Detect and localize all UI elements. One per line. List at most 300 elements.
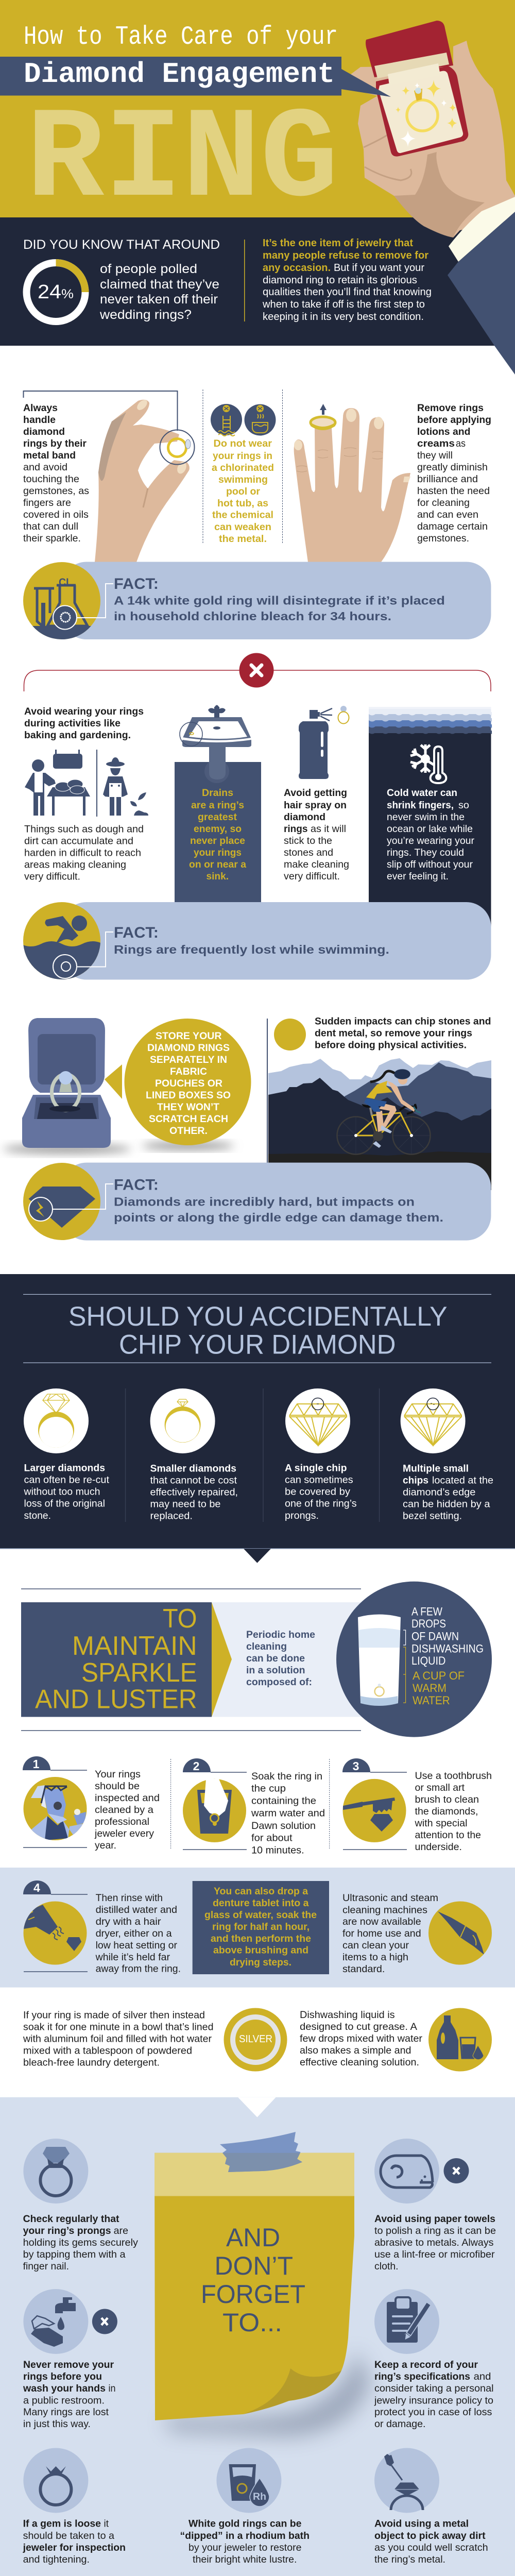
step 3: 3 xyxy=(353,1759,359,1773)
dough text xyxy=(24,824,144,882)
illustration: open hand with ring xyxy=(294,404,410,562)
callout: denture tablet: glass of water, soak the xyxy=(204,1909,317,1921)
tip: wash hands: a public restroom. xyxy=(23,2395,105,2406)
remove rings text: creams xyxy=(417,438,455,449)
icon: small diamond ring xyxy=(150,1388,215,1453)
panel: cold water: shrink fingers, xyxy=(387,800,454,811)
intro paragraph: any occasion. xyxy=(263,262,331,274)
step 4: dry with a hair xyxy=(96,1916,161,1927)
chip text: smaller diamonds: that cannot be cost xyxy=(150,1475,237,1486)
icon: large diamond ring xyxy=(24,1388,89,1453)
tip: avoid paper towels: cloth. xyxy=(374,2261,399,2272)
tip: loose gem xyxy=(23,2448,126,2565)
handle rings text xyxy=(23,402,89,544)
chip column dividers xyxy=(126,1388,380,1522)
tip: check prongs: Check regularly that xyxy=(23,2213,119,2225)
step 1: Your rings xyxy=(95,1769,141,1780)
fact panel: diamond hardness: FACT: xyxy=(114,1177,159,1194)
icon: silver plate xyxy=(224,2008,287,2071)
donut chart: 24%: 24 xyxy=(38,281,61,303)
intro paragraph xyxy=(262,238,432,323)
chip text: larger diamonds: loss of the original xyxy=(24,1498,105,1509)
panel: cold water: rings. They could xyxy=(387,847,464,858)
callout: store your rings xyxy=(105,1019,251,1149)
maintain title box: TO xyxy=(163,1604,197,1634)
handle rings text: diamond xyxy=(23,426,65,437)
dough text: dirt can accumulate and xyxy=(24,836,133,847)
remove rings text: and can even xyxy=(417,509,478,520)
tip: metal object xyxy=(374,2448,488,2565)
hair spray text: rings xyxy=(284,823,308,835)
fact panel: chlorine bleach xyxy=(23,562,491,639)
baking and gardening heading xyxy=(24,706,144,741)
chlorine warning text xyxy=(212,438,274,545)
fact panel: diamond hardness xyxy=(23,1163,491,1241)
fact panel: swimming: FACT: xyxy=(114,924,159,941)
tip: check prongs: finger nail. xyxy=(23,2261,69,2272)
illustration: hand pinching ring xyxy=(95,398,195,562)
handle rings text: fingers are xyxy=(23,497,71,509)
icon: hair spray and ring xyxy=(299,706,349,779)
fact panel: chlorine bleach: CL xyxy=(59,577,72,588)
chip text: larger diamonds: stone. xyxy=(24,1510,51,1521)
intro paragraph: It’s the one item of jewelry that xyxy=(263,238,413,249)
section background: chip your diamond xyxy=(0,1274,515,1563)
intro paragraph: qualities then you’ll find that knowing xyxy=(263,286,432,298)
tip: rhodium bath: “dipped” in a rhodium bath xyxy=(180,2530,310,2541)
hair spray text: very difficult. xyxy=(284,871,340,882)
header background xyxy=(0,0,515,217)
maintain rules xyxy=(21,1589,361,1731)
remove rings text: for cleaning xyxy=(417,497,470,509)
poll statement: claimed that they’ve xyxy=(100,277,219,292)
callout: store your rings: LINED BOXES SO xyxy=(146,1090,231,1101)
chip text: multiple chips: Multiple small xyxy=(403,1463,469,1475)
chlorine warning text: pool or xyxy=(226,486,260,497)
title banner xyxy=(0,57,391,97)
chip text: larger diamonds xyxy=(23,1463,110,1521)
intro background xyxy=(0,217,515,346)
donut chart: 24% xyxy=(27,263,85,321)
tip: check prongs: by tapping them with a xyxy=(23,2249,126,2260)
do not wear dividers xyxy=(203,389,282,544)
remove rings text: brilliance and xyxy=(417,473,478,485)
tip: avoid paper towels: to polish a ring as it can be xyxy=(374,2225,496,2236)
tip: metal object: Avoid using a metal xyxy=(374,2518,469,2530)
panel: drains xyxy=(175,705,261,906)
handle rings text: Always xyxy=(23,402,58,414)
illustration: hand holding ring box xyxy=(341,21,515,375)
callout: denture tablet: You can also drop a xyxy=(214,1886,308,1897)
fact panel: diamond hardness: Diamonds are incredibly hard, but impacts on xyxy=(114,1195,415,1208)
panel: cold water: Cold water can xyxy=(387,787,457,799)
step 1 xyxy=(23,1756,160,1851)
ultrasonic text: for home use and xyxy=(342,1928,421,1939)
tip: wash hands: rings before you xyxy=(23,2371,102,2382)
tip: rhodium bath: Rh xyxy=(253,2492,266,2502)
chip text: single chip: prongs. xyxy=(285,1510,319,1521)
remove rings text: Remove rings xyxy=(417,402,484,414)
fact panel: chlorine bleach: in household chlorine bleach for 34 hours. xyxy=(114,609,391,623)
chip section heading: SHOULD YOU ACCIDENTALLY xyxy=(68,1301,448,1332)
ultrasonic text xyxy=(342,1892,438,1975)
callout: denture tablet xyxy=(193,1881,329,1974)
tip: keep a record: protect you in case of loss xyxy=(374,2406,492,2418)
band: further cleaning steps xyxy=(0,1868,515,1988)
icon: dish soap bottle and glass xyxy=(428,2008,492,2071)
ultrasonic text: are now available xyxy=(342,1916,421,1927)
illustration: mountains and cyclist xyxy=(268,1058,491,1190)
step 4: 4 xyxy=(33,1881,40,1894)
silver cleaning text: soak it for one minute in a bowl that’s lined xyxy=(23,2022,213,2033)
dishwashing liquid text: effective cleaning solution. xyxy=(300,2057,419,2068)
panel: cold water: slip off without your xyxy=(387,859,473,870)
panel: drains: your rings xyxy=(194,847,242,858)
chip text: larger diamonds: without too much xyxy=(23,1486,100,1497)
solution circle with glass: DISHWASHING xyxy=(411,1642,484,1655)
chlorine warning text: the chemical xyxy=(212,509,273,520)
icon: ultrasonic cleaner xyxy=(428,1901,492,1965)
step 1: should be xyxy=(95,1781,140,1792)
silver cleaning text: If your ring is made of silver then instead xyxy=(23,2010,205,2021)
icon: diamond single chip xyxy=(285,1388,350,1453)
remove rings text: they will xyxy=(417,450,453,461)
panel: cold water xyxy=(369,707,492,928)
fact panel: chlorine bleach: FACT: xyxy=(114,575,159,592)
hair spray text: stick to the xyxy=(284,835,332,846)
chip section heading xyxy=(23,1294,491,1363)
callout: denture tablet: denture tablet into a xyxy=(213,1897,309,1909)
tip: rhodium bath: White gold rings can be xyxy=(188,2518,302,2530)
step 1: inspected and xyxy=(95,1792,160,1804)
chip text: smaller diamonds xyxy=(150,1463,238,1522)
tip: check prongs xyxy=(23,2139,138,2272)
callout: store your rings: DIAMOND RINGS xyxy=(147,1042,230,1054)
callout: store your rings: SCRATCH EACH xyxy=(149,1113,228,1125)
baking and gardening heading: baking and gardening. xyxy=(24,730,131,741)
remove rings text: as xyxy=(456,438,466,449)
physical activities text xyxy=(315,1016,491,1050)
callout: store your rings: THEY WON’T xyxy=(157,1101,219,1113)
remove rings text xyxy=(417,402,491,544)
panel: drains: Drains xyxy=(202,787,233,799)
tip: wash hands: in just this way. xyxy=(23,2418,91,2430)
step 2: for about xyxy=(251,1833,293,1844)
dishwashing liquid text: also makes a simple and xyxy=(300,2045,411,2056)
tip: check prongs: holding its gems securely xyxy=(23,2237,138,2248)
chip text: single chip: A single chip xyxy=(285,1463,347,1474)
illustration: ring box xyxy=(3,1018,131,1154)
step 3: the diamonds, xyxy=(415,1806,478,1817)
tip: rhodium bath: by your jeweler to restore xyxy=(188,2542,302,2553)
tip: keep a record: or damage. xyxy=(374,2418,425,2430)
tip: loose gem: If a gem is loose xyxy=(23,2518,101,2530)
handle rings text: touching the xyxy=(23,473,79,485)
periodic cleaning text: in a solution xyxy=(246,1665,305,1676)
title line one: How to Take Care of your xyxy=(24,23,338,52)
chip text: multiple chips: diamond’s edge xyxy=(403,1487,476,1498)
panel: cold water: ever feeling it. xyxy=(387,871,449,882)
hair spray text: diamond xyxy=(284,811,325,823)
tip: avoid paper towels xyxy=(374,2139,496,2272)
silver cleaning text xyxy=(23,2010,213,2068)
warning frame with X xyxy=(24,653,491,691)
chlorine warning text: can weaken xyxy=(214,521,271,533)
maintain light panel xyxy=(212,1602,371,1717)
ultrasonic text: standard. xyxy=(342,1963,385,1975)
periodic cleaning text: cleaning xyxy=(246,1641,287,1652)
panel: cold water: so xyxy=(458,800,469,811)
step 1: jeweler every xyxy=(94,1828,154,1839)
step 2: Dawn solution xyxy=(251,1820,316,1832)
intro paragraph: keeping it in its very best condition. xyxy=(263,311,424,323)
chip text: single chip: be covered by xyxy=(285,1486,350,1497)
fact panel: swimming xyxy=(21,902,491,984)
tip: loose gem: and tightening. xyxy=(23,2554,90,2565)
chip text: smaller diamonds: replaced. xyxy=(150,1511,193,1522)
step 1: professional xyxy=(95,1816,149,1827)
tip: keep a record: ring’s specifications xyxy=(374,2371,470,2382)
callout: store your rings: OTHER. xyxy=(169,1125,208,1137)
title word RING: RING xyxy=(26,88,338,234)
step 1: 1 xyxy=(33,1757,40,1771)
tip: check prongs: are xyxy=(114,2225,128,2236)
solution circle with glass xyxy=(336,1582,492,1737)
solution circle with glass: DROPS xyxy=(411,1617,446,1630)
periodic cleaning text: composed of: xyxy=(246,1676,312,1688)
callout: store your rings: POUCHES OR xyxy=(155,1078,222,1089)
step 4: distilled water and xyxy=(96,1904,177,1916)
physical activities text: Sudden impacts can chip stones and xyxy=(315,1016,491,1027)
intro divider xyxy=(244,240,245,321)
handle rings text: their sparkle. xyxy=(23,533,81,544)
remove rings text: gemstones. xyxy=(417,533,469,544)
step 3: attention to the xyxy=(415,1829,481,1841)
tip: avoid paper towels: Avoid using paper towels xyxy=(374,2213,495,2225)
step 4: Then rinse with xyxy=(96,1892,163,1904)
physical activities text: dent metal, so remove your rings xyxy=(315,1027,472,1039)
remove rings text: greatly diminish xyxy=(417,462,488,473)
silver cleaning text: mixed with a tablespoon of powdered xyxy=(23,2045,192,2057)
step 3: brush to clean xyxy=(415,1794,479,1805)
sticky note: AND xyxy=(226,2223,280,2252)
step 2: warm water and xyxy=(251,1807,325,1819)
intro paragraph: many people refuse to remove for xyxy=(263,250,428,261)
tip: loose gem: should be taken to a xyxy=(23,2530,114,2541)
panel: cold water: never swim in the xyxy=(387,811,465,823)
tip: metal object: as you could well scratch xyxy=(374,2542,488,2553)
dough text: Things such as dough and xyxy=(24,824,144,835)
chlorine warning text: hot tub, as xyxy=(217,498,268,509)
panel: cold water: ocean or lake while xyxy=(387,823,473,835)
dough text: areas making cleaning xyxy=(24,859,126,870)
dishwashing liquid text: Dishwashing liquid is xyxy=(300,2009,395,2021)
tip: avoid paper towels: abrasive to metals. Always xyxy=(374,2237,494,2248)
baking and gardening heading: Avoid wearing your rings xyxy=(24,706,144,717)
chlorine warning text: your rings in xyxy=(213,450,272,462)
tip: wash hands: in xyxy=(108,2383,115,2394)
ultrasonic text: cleaning machines xyxy=(342,1905,427,1916)
tip: metal object: the ring’s metal. xyxy=(374,2554,445,2565)
chip text: single chip xyxy=(285,1463,357,1521)
handle rings text: gemstones, as xyxy=(23,485,89,497)
panel: drains: greatest xyxy=(198,811,237,823)
tip: loose gem: jeweler for inspection xyxy=(23,2542,126,2553)
icon: gold circle xyxy=(274,1019,306,1050)
step 4: away from the ring. xyxy=(96,1963,181,1974)
ultrasonic text: items to a high xyxy=(342,1952,408,1963)
donut chart: 24%: % xyxy=(61,287,74,301)
title banner: Diamond Engagement xyxy=(24,58,335,91)
sticky note: DON’T xyxy=(214,2251,293,2280)
poll statement: of people polled xyxy=(100,262,197,276)
callout: denture tablet: drying steps. xyxy=(230,1957,291,1968)
ultrasonic text: Ultrasonic and steam xyxy=(342,1892,438,1904)
panel: drains: enemy, so xyxy=(194,823,242,835)
sticky note: FORGET xyxy=(201,2280,305,2309)
sticky note: TO... xyxy=(222,2308,282,2337)
handle rings text: covered in oils xyxy=(23,509,89,520)
sticky note xyxy=(154,2132,371,2437)
periodic cleaning text: Periodic home xyxy=(246,1629,315,1640)
step 2: containing the xyxy=(251,1795,316,1807)
baking and gardening heading: during activities like xyxy=(24,718,121,729)
chip section heading: CHIP YOUR DIAMOND xyxy=(119,1329,396,1360)
chip text: multiple chips: can be hidden by a xyxy=(403,1498,490,1510)
maintain title box: MAINTAIN xyxy=(72,1631,197,1661)
dishwashing liquid text: few drops mixed with water xyxy=(300,2033,423,2044)
hair spray text: Avoid getting xyxy=(284,787,347,799)
tip: check prongs: your ring’s prongs xyxy=(23,2225,111,2236)
chip text: multiple chips xyxy=(403,1463,493,1522)
tip: keep a record: Keep a record of your xyxy=(374,2359,478,2370)
chip text: smaller diamonds: may need to be xyxy=(150,1498,220,1510)
tip: avoid paper towels: use a lint-free or microfiber xyxy=(374,2249,495,2260)
chip text: larger diamonds: Larger diamonds xyxy=(24,1463,105,1474)
tip: keep a record: jewelry insurance policy to xyxy=(374,2395,493,2406)
tip: keep a record xyxy=(374,2289,493,2430)
solution circle with glass: WARM xyxy=(413,1682,447,1694)
silver cleaning text: bleach-free laundry detergent. xyxy=(23,2057,160,2068)
step 1: cleaned by a xyxy=(95,1804,153,1816)
remove rings text: lotions and xyxy=(417,426,471,437)
step 2 xyxy=(183,1758,325,1856)
callout: store your rings: SEPARATELY IN xyxy=(150,1054,227,1065)
fact panel: swimming: Rings are frequently lost while swimming. xyxy=(114,943,389,956)
chip text: smaller diamonds: Smaller diamonds xyxy=(150,1463,236,1475)
physical activities text: before doing physical activities. xyxy=(315,1039,467,1050)
panel: drains: are a ring’s xyxy=(191,800,244,811)
tip: keep a record: consider taking a personal xyxy=(374,2383,493,2394)
intro paragraph: when to take if off is the first step to xyxy=(262,299,425,310)
step 2: Soak the ring in xyxy=(251,1771,322,1782)
poll statement xyxy=(99,262,219,322)
chlorine warning text: Do not wear xyxy=(213,438,272,449)
dough text: harden in difficult to reach xyxy=(24,847,141,858)
tip: wash hands xyxy=(23,2289,117,2430)
step 1: year. xyxy=(95,1840,116,1851)
handle rings text: rings by their xyxy=(23,438,87,449)
tip: keep a record: and xyxy=(474,2371,491,2382)
icon: hot tub no xyxy=(244,404,276,436)
chlorine warning text: swimming xyxy=(218,474,268,485)
step 4: dryer, either on a xyxy=(96,1928,172,1939)
step 4: while it’s held far xyxy=(95,1952,170,1963)
callout: denture tablet: ring for half an hour, xyxy=(212,1921,310,1933)
solution circle with glass: WATER xyxy=(413,1694,450,1707)
tip: wash hands: Many rings are lost xyxy=(23,2406,109,2418)
chip text: single chip: can sometimes xyxy=(285,1475,353,1486)
panel: drains: on or near a xyxy=(189,859,246,870)
poll statement: wedding rings? xyxy=(99,308,192,322)
remove rings text: before applying xyxy=(417,414,491,426)
solution circle with glass: A CUP OF xyxy=(413,1669,465,1682)
solution circle with glass: OF DAWN xyxy=(411,1630,459,1642)
step 3: Use a toothbrush xyxy=(415,1770,492,1782)
callout: store your rings: STORE YOUR xyxy=(156,1030,221,1042)
dishwashing liquid text xyxy=(300,2009,423,2068)
chip text: single chip: one of the ring’s xyxy=(285,1498,357,1509)
intro heading: DID YOU KNOW THAT AROUND xyxy=(23,238,220,252)
remove rings text: damage certain xyxy=(417,521,488,532)
tip: metal object: object to pick away dirt xyxy=(374,2530,486,2541)
tip: rhodium bath xyxy=(180,2448,310,2565)
step 2: the cup xyxy=(251,1783,286,1794)
handle rings text: metal band xyxy=(23,450,76,461)
callout: store your rings: FABRIC xyxy=(170,1066,207,1077)
step 3 xyxy=(342,1758,492,1853)
intro paragraph: But if you want your xyxy=(334,262,424,274)
dishwashing liquid text: designed to cut grease. A xyxy=(300,2021,417,2032)
chlorine warning text: a chlorinated xyxy=(212,462,274,473)
tip: wash hands: wash your hands xyxy=(23,2383,106,2394)
tip: wash hands: Never remove your xyxy=(23,2359,114,2370)
callout bracket to ring xyxy=(24,391,177,431)
step 3: underside. xyxy=(415,1841,462,1853)
step 2: 2 xyxy=(193,1759,199,1773)
chip text: larger diamonds: can often be re-cut xyxy=(24,1475,110,1486)
icon: diamond multiple chips xyxy=(401,1388,466,1453)
step 2: 10 minutes. xyxy=(251,1844,304,1856)
intro paragraph: diamond ring to retain its glorious xyxy=(263,275,417,286)
icon: baker and gardener xyxy=(25,750,148,817)
handle rings text: and avoid xyxy=(23,462,67,473)
poll statement: never taken off their xyxy=(100,292,218,307)
hair spray text xyxy=(284,787,349,882)
chip text: multiple chips: chips xyxy=(403,1475,428,1486)
maintain title box: AND LUSTER xyxy=(35,1685,197,1715)
panel: drains: sink. xyxy=(206,871,229,882)
silver cleaning text: with aluminum foil and filled with hot water xyxy=(23,2033,212,2045)
section background: don't forget xyxy=(0,2097,515,2576)
chip text: multiple chips: bezel setting. xyxy=(403,1511,462,1522)
panel: cold water: you’re wearing your xyxy=(387,835,475,846)
physical activities divider xyxy=(267,1019,268,1163)
remove rings text: hasten the need xyxy=(417,485,490,497)
tip: loose gem: it xyxy=(104,2518,109,2530)
tip: rhodium bath: their bright white lustre. xyxy=(193,2554,297,2565)
handle rings text: that can dull xyxy=(23,521,78,532)
fact panel: chlorine bleach: A 14k white gold ring will disintegrate if it’s placed xyxy=(114,594,445,607)
callout: denture tablet: and then perform the xyxy=(211,1933,311,1944)
periodic cleaning text xyxy=(246,1629,315,1688)
chip text: multiple chips: located at the xyxy=(432,1475,493,1486)
step 3: or small art xyxy=(415,1782,465,1793)
callout: denture tablet: above brushing and xyxy=(213,1945,308,1956)
dough text: very difficult. xyxy=(24,871,80,882)
handle rings text: handle xyxy=(23,414,56,426)
steps dividers xyxy=(171,1759,330,1850)
